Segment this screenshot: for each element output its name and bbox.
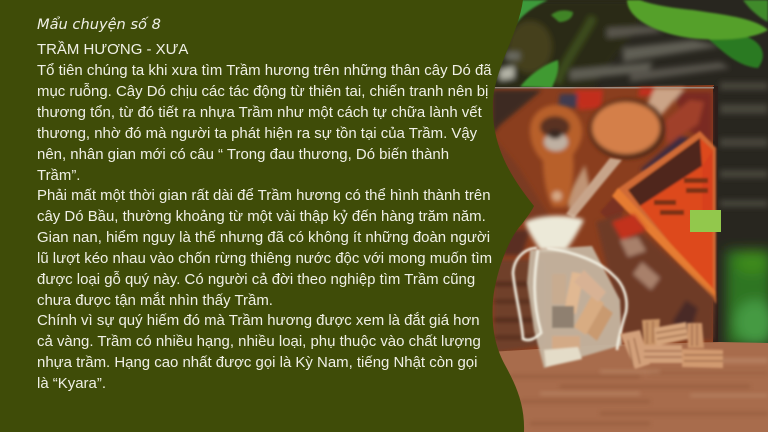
- text block: paragraph 2: Gian nan, hiểm nguy là thế nhưng đã có không ít những đoàn người: [37, 229, 490, 246]
- wooden table: [490, 342, 768, 432]
- text block: paragraph 3: là “Kyara”.: [37, 375, 106, 392]
- text block: paragraph 2: chưa được tận mắt nhìn thấy Trầm.: [37, 292, 273, 309]
- text block: paragraph 1: [37, 62, 492, 184]
- text block: paragraph 2: Phải mất một thời gian rất dài để Trầm hương có thể hình thành trên: [37, 187, 491, 204]
- text block: paragraph 3: Chính vì sự quý hiếm đó mà Trầm hương được xem là đắt giá hơn: [37, 312, 480, 329]
- product box: [490, 85, 721, 353]
- tray: [612, 131, 716, 304]
- text block: paragraph 1: Trầm”.: [37, 167, 80, 184]
- text block: paragraph 3: cả vàng. Trầm có nhiều hạng, nhiều loại, phụ thuộc vào chất lượng: [37, 333, 481, 350]
- green label: [690, 210, 721, 232]
- leaves: [513, 0, 768, 88]
- text block: paragraph 3: [37, 312, 481, 392]
- text block: paragraph 1: thương, nhờ đó mà người ta phát hiện ra sự tồn tại của Trầm. Vậy: [37, 125, 477, 142]
- text block: paragraph 1: mục ruỗng. Cây Dó chịu các tác động từ thiên tai, chiến tranh nên bị: [37, 83, 488, 100]
- text block: paragraph 1: thương tổn, từ đó tiết ra nhựa Trầm như một cách tự chữa lành vết: [37, 104, 482, 121]
- incense sticks: [620, 319, 723, 369]
- text block: paragraph 1: Tổ tiên chúng ta khi xưa tìm Trầm hương trên những thân cây Dó đã: [37, 62, 492, 79]
- text block: paragraph 1: nên, nhân gian mới có câu “ Trong đau thương, Dó biến thành: [37, 146, 449, 163]
- heading: title: TRẦM HƯƠNG - XƯA: [37, 41, 188, 58]
- blurred backdrop: [480, 0, 768, 432]
- text block: paragraph 2: được loại gỗ quý này. Có người cả đời theo nghiệp tìm Trầm cũng: [37, 271, 475, 288]
- text block: paragraph 3: nhựa trầm. Hạng cao nhất được gọi là Kỳ Nam, tiếng Nhật còn gọi: [37, 354, 477, 371]
- text block: paragraph 2: [37, 187, 492, 309]
- heading: story number: Mẩu chuyện số 8: [37, 16, 161, 33]
- text block: paragraph 2: lũ lượt kéo nhau vào chốn rừng thiêng nước độc với mong muốn tìm: [37, 250, 492, 267]
- text block: paragraph 2: cây Dó Bầu, thường khoảng từ một vài thập kỷ đến hàng trăm năm.: [37, 208, 486, 225]
- organza bag with incense: [513, 216, 627, 368]
